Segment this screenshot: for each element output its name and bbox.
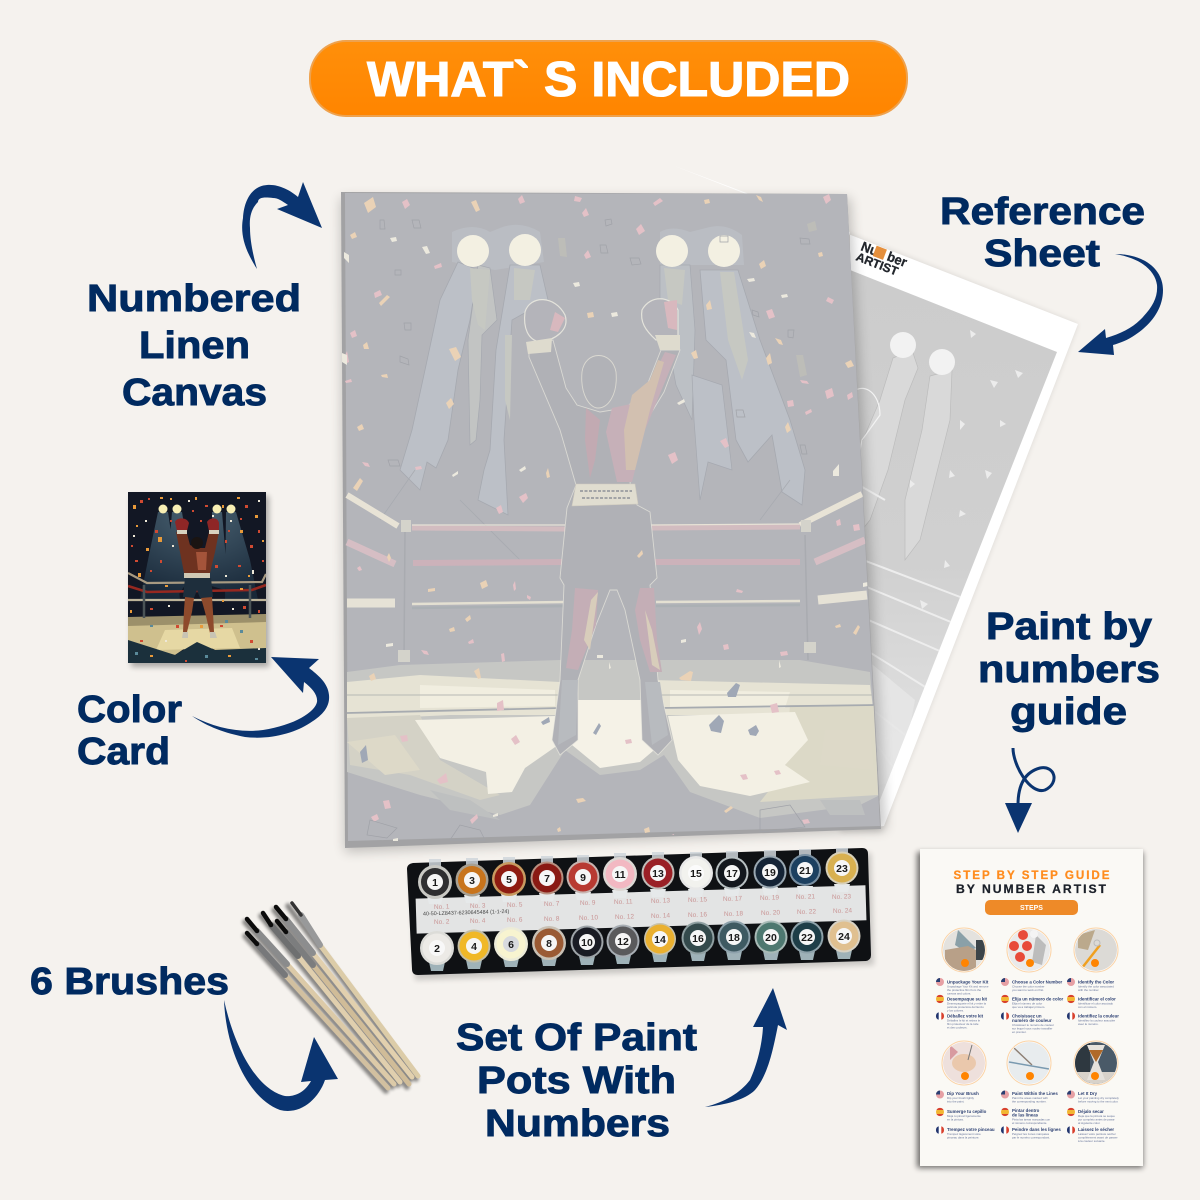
- step 6 text: [1078, 1091, 1119, 1143]
- pot 14: 14: [654, 934, 666, 946]
- step 2 text: Elija el número de color: [1012, 1002, 1042, 1006]
- card boxer: [175, 518, 219, 638]
- pot 2: 2: [434, 943, 440, 955]
- pot 11: [603, 857, 637, 891]
- step 1 text: the protective film from the: [947, 988, 981, 992]
- pot 24: [828, 920, 860, 952]
- label: reference sheet: [940, 191, 1145, 275]
- strip text: No. 1: [434, 904, 450, 911]
- arrow: to reference sheet: [1078, 254, 1163, 355]
- boxer figure: [525, 299, 680, 755]
- strip text: No. 15: [688, 896, 708, 904]
- brush 2: [247, 919, 394, 1084]
- stadium lights: [457, 234, 740, 267]
- step 4 text: into the paint.: [947, 1100, 965, 1104]
- strip text: No. 4: [470, 918, 486, 925]
- label: color card: Card: [77, 731, 170, 773]
- pot 23: 23: [836, 863, 848, 875]
- color card: [128, 492, 269, 667]
- strip text: No. 5: [507, 902, 523, 909]
- step 4 text: pinceau dans la peinture.: [947, 1136, 979, 1140]
- pot 17: [716, 856, 748, 890]
- step 4 text: Trempez votre pinceau: [947, 1127, 995, 1132]
- card lights: [158, 504, 236, 514]
- label: paint by numbers guide: guide: [1010, 691, 1127, 733]
- step 6 text: Deja que la pintura se seque: [1078, 1114, 1115, 1118]
- pot 24: 24: [838, 931, 850, 943]
- step 5 text: el número correspondiente.: [1012, 1121, 1047, 1125]
- pot 23: [826, 852, 858, 884]
- guide steps pill: [985, 900, 1078, 915]
- label: paint by numbers guide: [978, 606, 1160, 733]
- step 2 text: Choisissez le numéro de couleur: [1012, 1023, 1054, 1027]
- pot 12: [606, 924, 640, 958]
- arrow: to canvas: [242, 182, 322, 269]
- strip text: No. 24: [833, 907, 853, 915]
- step 3 text: con el número.: [1078, 1005, 1097, 1009]
- step 6 text: complètement avant de passer: [1078, 1136, 1118, 1140]
- guide steps pill: STEPS: [1020, 905, 1043, 912]
- strip text: No. 3: [470, 903, 486, 910]
- step 6 text: al siguiente color.: [1078, 1121, 1101, 1125]
- pot 13: [642, 856, 674, 890]
- step 2 text: sur lequel vous voulez travailler: [1012, 1026, 1052, 1030]
- pot 10: 10: [581, 937, 593, 949]
- step photo 2: [1007, 928, 1051, 972]
- pot 3: 3: [469, 875, 475, 887]
- pot 4: 4: [471, 941, 477, 953]
- step 4 text: Moja tu pincel ligeramente: [947, 1114, 981, 1118]
- pot 15: 15: [690, 868, 702, 880]
- paper strip: [416, 885, 866, 934]
- strip text: No. 9: [580, 900, 596, 907]
- card floor: [128, 622, 266, 655]
- step 2 text: que va a trabajar primero.: [1012, 1005, 1045, 1009]
- step 5 text: [1012, 1091, 1061, 1140]
- language flags: [936, 978, 1075, 1134]
- sheet logo: Nu ber: [859, 239, 910, 270]
- strip text: No. 12: [615, 913, 635, 921]
- arrow: to paint pots: [705, 988, 787, 1107]
- step 5 text: Paint Within the Lines: [1012, 1091, 1058, 1096]
- step photo 6: [1074, 1041, 1118, 1085]
- step photo 1: [942, 928, 986, 975]
- strip text: No. 14: [651, 912, 671, 920]
- step 2 text: Choose a Color Number: [1012, 980, 1063, 984]
- label: color card: Color: [77, 689, 182, 731]
- tray base: [407, 848, 871, 975]
- strip text: No. 13: [651, 897, 671, 905]
- strip text: No. 10: [579, 914, 599, 922]
- pot 15: [679, 856, 713, 890]
- step 4 text: [947, 1091, 995, 1140]
- step photo 4: [942, 1041, 986, 1085]
- label: set of paint pots: [456, 1017, 697, 1145]
- step 1 text: Desempaque su kit: [947, 996, 988, 1002]
- pot 9: 9: [580, 872, 586, 884]
- label: color card: [77, 689, 182, 773]
- label: reference sheet: Reference: [940, 191, 1145, 233]
- boxer wrist tape: [526, 335, 680, 354]
- step 1 text: Desempaquete el kit y retire la: [947, 1002, 986, 1006]
- label: paint by numbers guide: numbers: [978, 649, 1160, 691]
- strip text: No. 22: [797, 908, 817, 916]
- pot 20: 20: [765, 932, 777, 944]
- step 1 text: película protectora del lienzo: [947, 1005, 984, 1009]
- arrow: to guide: [1005, 748, 1054, 833]
- pot 5: [492, 862, 526, 896]
- step 6 text: Laissez votre peinture sécher: [1078, 1132, 1116, 1136]
- step 5 text: par le numéro correspondant.: [1012, 1136, 1050, 1140]
- step 2 text: [1012, 980, 1064, 1034]
- ring ropes: [347, 494, 867, 660]
- step 2 text: Elija un número de color: [1012, 996, 1064, 1002]
- paint pots tray: [407, 848, 874, 980]
- step 1 text: Déballez le kit et retirez le: [947, 1018, 980, 1022]
- card ropes: [128, 573, 266, 583]
- strip text: No. 8: [544, 916, 560, 923]
- sheet logo: ARTIST: [854, 250, 901, 279]
- pot 22: 22: [801, 932, 813, 944]
- strip text: No. 18: [724, 910, 744, 918]
- step 4 text: Trempez légèrement votre: [947, 1132, 981, 1136]
- step 6 text: Let your painting dry completely: [1078, 1096, 1119, 1100]
- confetti cream: [342, 237, 868, 841]
- title text: WHAT` S INCLUDED: [367, 53, 850, 107]
- strip text: No. 11: [614, 898, 633, 906]
- pot 6: 6: [508, 939, 514, 951]
- brush 6: [292, 903, 418, 1076]
- label: six brushes: 6 Brushes: [30, 961, 229, 1003]
- step 5 text: de las líneas: [1012, 1112, 1039, 1118]
- step 2 text: Choose the color number: [1012, 984, 1044, 988]
- step 1 text: canvas and colors.: [947, 992, 971, 996]
- confetti peach: [350, 195, 860, 833]
- pot 18: 18: [728, 932, 740, 944]
- strip text: [423, 893, 853, 926]
- arrow: to brushes: [224, 1000, 338, 1111]
- pot 21: [789, 854, 821, 886]
- step by step guide sheet: [917, 849, 1143, 1168]
- step 3 text: with the number.: [1078, 988, 1099, 992]
- step 3 text: Identificar el color: [1078, 996, 1116, 1002]
- pot 22: [790, 920, 824, 954]
- guide heading: [954, 869, 1110, 896]
- pot 16: [682, 922, 714, 954]
- pot 13: 13: [652, 868, 664, 880]
- step 4 text: Sumerge tu cepillo: [947, 1109, 987, 1114]
- floor of ring: [347, 660, 880, 820]
- pot 18: [718, 920, 750, 954]
- label: set of paint pots: Numbers: [485, 1103, 670, 1145]
- strip text: No. 19: [760, 894, 780, 902]
- card spotlight beams: [140, 512, 258, 600]
- card confetti: [131, 498, 264, 662]
- pot 4: [458, 930, 490, 962]
- pot 19: [754, 856, 786, 888]
- step 6 text: Déjalo secar: [1078, 1109, 1104, 1114]
- strip text: No. 23: [832, 893, 852, 901]
- boxer legs colour: [566, 588, 662, 672]
- step 1 text: film protecteur de la toile: [947, 1022, 979, 1026]
- step 5 text: Peignez les zones marquées: [1012, 1132, 1050, 1136]
- pot 3: [456, 864, 488, 896]
- step 1 text: [947, 980, 989, 1030]
- arrow: to color card: [192, 657, 329, 738]
- small outline regions: [367, 219, 810, 840]
- guide heading: BY NUMBER ARTIST: [956, 882, 1107, 896]
- step 6 text: before moving to the next color.: [1078, 1100, 1119, 1104]
- brush 3: [263, 913, 400, 1082]
- confetti pink: [344, 194, 860, 852]
- label: numbered linen canvas: Canvas: [122, 372, 267, 414]
- step 3 text: Identificar el color asociado: [1078, 1002, 1113, 1006]
- guide heading: STEP BY STEP GUIDE: [954, 869, 1110, 882]
- step 6 text: à la couleur suivante.: [1078, 1139, 1106, 1143]
- pot 8: 8: [546, 938, 552, 950]
- pot 11: 11: [614, 869, 626, 881]
- step 4 text: Dip Your Brush: [947, 1091, 979, 1096]
- step 1 text: Unpackage Your Kit and remove: [947, 984, 989, 988]
- pot 12: 12: [617, 936, 629, 948]
- pot 19: 19: [764, 867, 776, 879]
- strip text: No. 20: [761, 909, 781, 917]
- boxer head: [582, 356, 616, 408]
- brush 1: [247, 933, 388, 1088]
- strip text: No. 7: [544, 901, 560, 908]
- label: set of paint pots: Pots With: [477, 1060, 676, 1102]
- brush 5: [276, 907, 412, 1077]
- step 5 text: the corresponding number.: [1012, 1100, 1047, 1104]
- step 3 text: Identify the Color: [1078, 980, 1114, 984]
- title banner: [309, 40, 908, 117]
- pot 21: 21: [799, 865, 811, 877]
- pot 14: [644, 923, 676, 955]
- strip text: No. 16: [688, 911, 708, 919]
- pot 9: [566, 860, 600, 894]
- step photo 3: [1074, 928, 1118, 972]
- label: paint by numbers guide: Paint by: [986, 606, 1152, 648]
- step 4 text: Dip your brush lightly: [947, 1096, 975, 1100]
- step photo 5: [1007, 1041, 1051, 1085]
- boxer torso colour: [606, 352, 676, 482]
- strip text: No. 21: [796, 893, 816, 901]
- step 2 text: en premier.: [1012, 1030, 1027, 1034]
- six brushes: [245, 903, 418, 1091]
- boxer gloves: [525, 300, 566, 342]
- step 3 text: Identifiez la couleur: [1078, 1014, 1119, 1018]
- step 6 text: por completo antes de pasar: [1078, 1118, 1115, 1122]
- pot 1: 1: [432, 877, 438, 889]
- label: set of paint pots: Set Of Paint: [456, 1017, 697, 1059]
- label: reference sheet: Sheet: [984, 233, 1100, 275]
- pot tabs: [429, 848, 848, 867]
- step 3 text: Identifiez la couleur associée: [1078, 1018, 1116, 1022]
- boxer waistband: [572, 484, 638, 506]
- label: numbered linen canvas: [87, 278, 301, 414]
- pot 20: [754, 920, 788, 954]
- step 1 text: Déballez votre kit: [947, 1014, 984, 1018]
- pot 5: 5: [506, 874, 512, 886]
- reference sheet: [672, 165, 1078, 832]
- step 5 text: Peindre dans les lignes: [1012, 1127, 1061, 1132]
- pot 10: [570, 926, 604, 958]
- step 5 text: Pintar dentro: [1012, 1108, 1040, 1113]
- pot 6: [494, 927, 528, 961]
- step 3 text: [1078, 980, 1119, 1026]
- step 2 text: numéro de couleur: [1012, 1018, 1052, 1023]
- label: numbered linen canvas: Linen: [139, 325, 250, 367]
- label: numbered linen canvas: Numbered: [87, 278, 301, 320]
- step 1 text: et des couleurs.: [947, 1026, 968, 1030]
- brush 4: [277, 921, 409, 1084]
- pot 1: [418, 865, 452, 899]
- pot 17: 17: [726, 868, 738, 880]
- step 4 text: en la pintura.: [947, 1118, 964, 1122]
- step 2 text: you want to work on first.: [1012, 988, 1044, 992]
- spotlight beams: [380, 225, 805, 560]
- strip text: No. 17: [723, 895, 743, 903]
- step 3 text: avec le numéro.: [1078, 1022, 1099, 1026]
- confetti slate: [360, 683, 759, 763]
- pot 7: [530, 862, 564, 894]
- step 5 text: Paint the areas marked with: [1012, 1096, 1048, 1100]
- step 6 text: Let It Dry: [1078, 1091, 1098, 1096]
- pot 8: [532, 926, 566, 960]
- strip text: No. 6: [507, 917, 523, 924]
- pot 2: [420, 931, 454, 965]
- pot 7: 7: [544, 873, 550, 885]
- strip text: No. 2: [434, 919, 450, 926]
- reference sheet artwork: [858, 330, 1023, 736]
- sheet logo: [854, 238, 910, 281]
- numbered linen canvas: [341, 192, 886, 852]
- confetti neutral: [558, 221, 817, 377]
- step 5 text: Pinta las áreas marcadas con: [1012, 1118, 1050, 1122]
- step 2 text: Choisissez un: [1012, 1014, 1042, 1018]
- strip text: 40-50-LZ8437-6230645484 (1-1-24): [423, 909, 510, 917]
- step 1 text: Unpackage Your Kit: [947, 980, 989, 984]
- pot 16: 16: [692, 933, 704, 945]
- turnbuckles: [398, 520, 816, 662]
- step 1 text: y los colores.: [947, 1008, 964, 1012]
- step 3 text: Identify the color associated: [1078, 984, 1114, 988]
- step 6 text: Laissez le sécher: [1078, 1127, 1114, 1132]
